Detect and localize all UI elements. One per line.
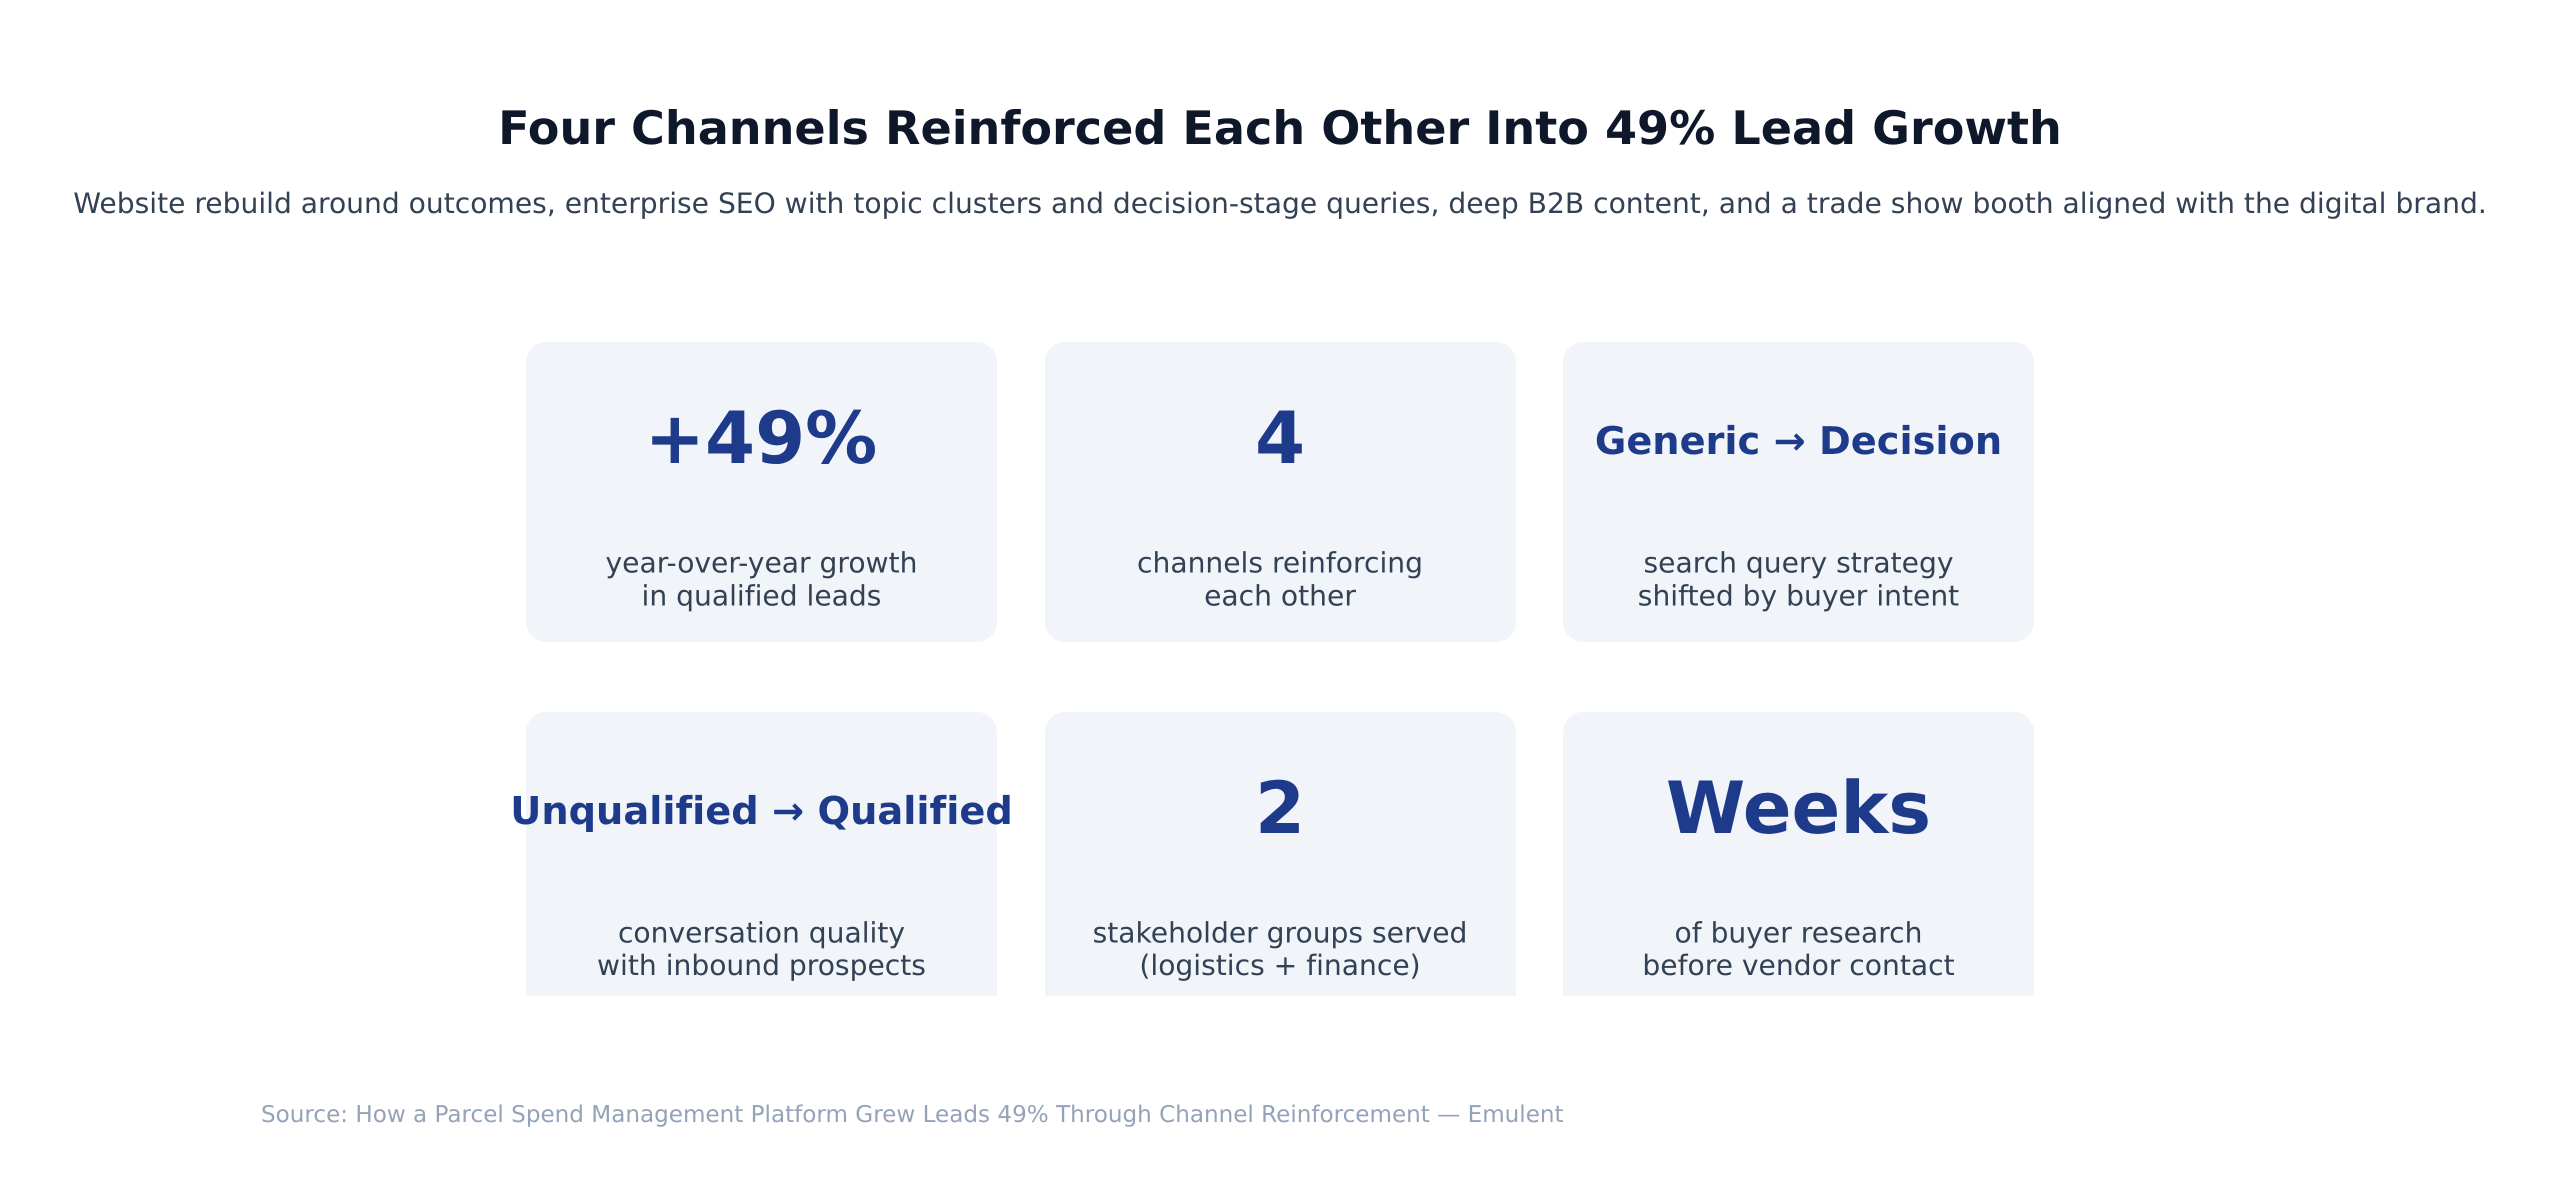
stat label: buyer research: before vendor contact [1642,949,1955,982]
stat value: Unqualified to Qualified: Unqualified → Qualified [510,789,1013,834]
stat label: conversation quality: with inbound prospects [597,949,926,982]
panel: query strategy stat [1563,342,2034,642]
stat label: qualified leads: in qualified leads [642,580,881,612]
stat label: channels: each other [1204,580,1356,612]
stat label: search query strategy: search query strategy [1644,546,1953,580]
stat value: Generic to Decision: Generic → Decision [1595,419,2002,464]
stat value: Weeks: Weeks [1666,766,1931,850]
panel: conversation quality stat [510,712,1013,996]
source line: Source: How a Parcel Spend Management Platform Grew Leads 49% Through Channel Reinforcement — Emulent [261,1102,1564,1128]
stat value: 4: 4 [1255,396,1305,480]
panel: +49% stat [526,342,997,642]
panel: stakeholder groups stat [1045,712,1516,996]
stat label: conversation quality: conversation quality [618,916,905,950]
stat label: buyer research: of buyer research [1674,916,1922,950]
panel: buyer research stat [1563,712,2034,996]
stat label: stakeholder groups: (logistics + finance) [1139,949,1421,982]
stat label: channels: channels reinforcing [1137,546,1423,580]
panel: 4 channels stat [1045,342,1516,642]
title: Four Channels Reinforced Each Other Into 49% Lead Growth [498,101,2062,155]
subtitle: Website rebuild around outcomes, enterprise SEO with topic clusters and decision-stage queries, deep B2B content, and a trade show booth aligned with the digital brand. [73,187,2487,220]
stat value: +49%: +49% [645,396,877,480]
stat value: 2: 2 [1255,766,1305,850]
stat label: search query strategy: shifted by buyer intent [1638,580,1959,612]
stat label: stakeholder groups: stakeholder groups served [1093,916,1467,950]
stat label: qualified leads: year-over-year growth [606,546,917,580]
